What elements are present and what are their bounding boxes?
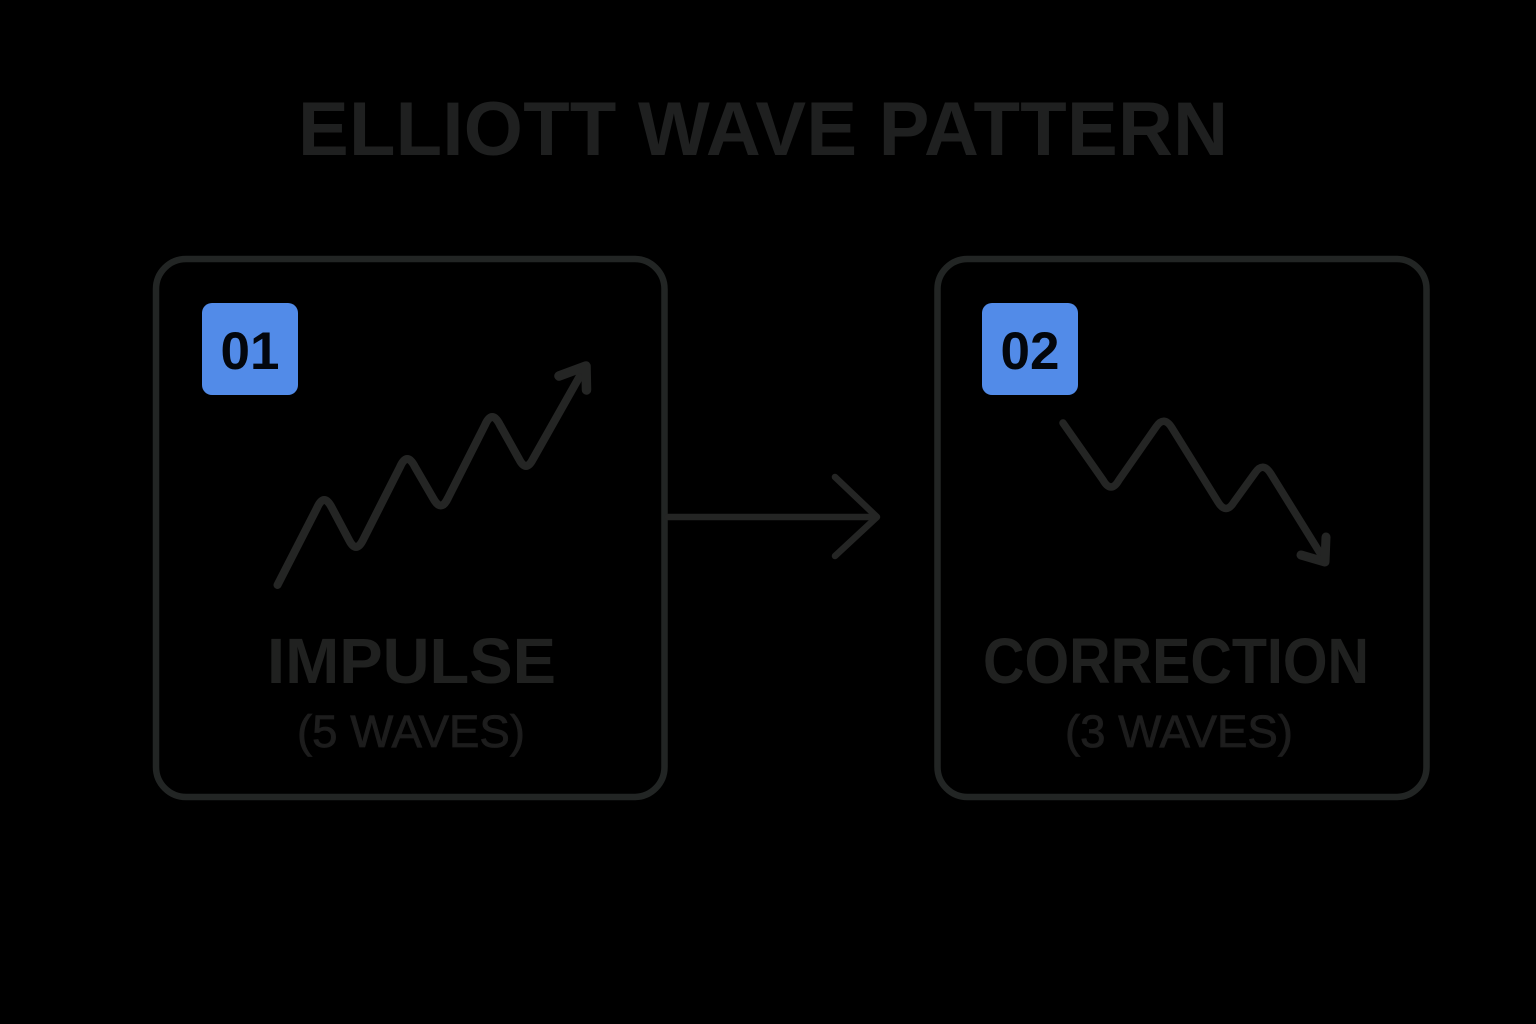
panel: correction (938, 259, 1426, 797)
icon: falling three-wave line with arrow (1063, 421, 1326, 562)
badge: 02: 02 (1001, 322, 1059, 381)
sublabel: 5 waves: (5 WAVES) (297, 706, 525, 757)
label: correction: CORRECTION (983, 625, 1369, 697)
title: ELLIOTT WAVE PATTERN (298, 87, 1228, 172)
panel: impulse (156, 259, 664, 797)
badge: 02 (982, 303, 1078, 395)
label: impulse: IMPULSE (267, 625, 556, 697)
badge: 01: 01 (221, 322, 279, 381)
arrow: impulse to correction (668, 477, 877, 556)
badge: 01 (202, 303, 298, 395)
icon: rising five-wave line with arrow (278, 366, 586, 585)
sublabel: 3 waves: (3 WAVES) (1065, 706, 1293, 757)
panel border: impulse (156, 259, 664, 797)
panel border: correction (938, 259, 1426, 797)
